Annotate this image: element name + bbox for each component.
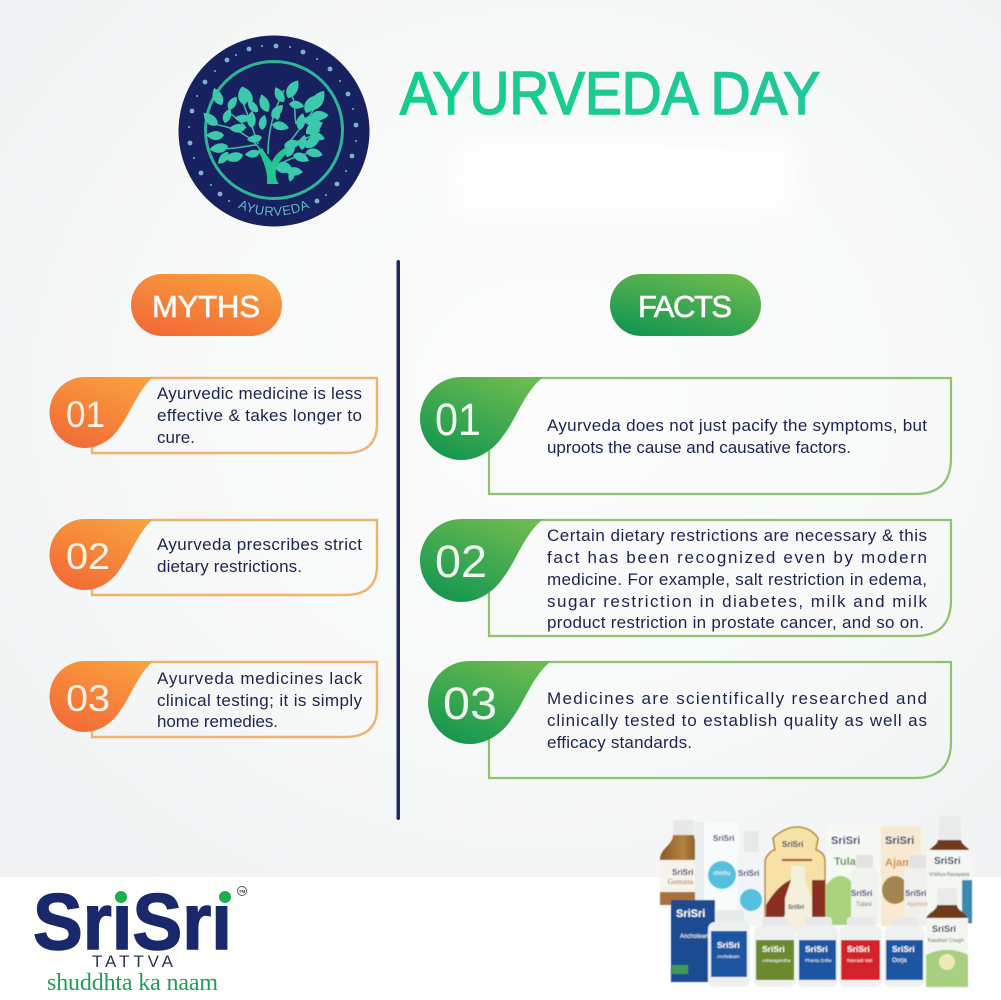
product: anchol carton: SriSri (676, 908, 705, 920)
fact 03 (428, 661, 951, 778)
fact 01 (420, 377, 951, 494)
brand logo: shuddhta ka naam (47, 970, 218, 996)
myth 01: Ayurvedic medicine is less (157, 384, 362, 403)
product: yellow carton: SriSri (782, 840, 803, 849)
product: tulasi carton (826, 825, 880, 925)
product: top right bottle: SriSri (934, 856, 961, 867)
fact 01: Ayurveda does not just pacify the symptoms, but (547, 416, 927, 435)
product: tub 1: Ancholeam (717, 954, 740, 959)
title: AYURVEDA DAY (400, 60, 820, 127)
product group (660, 816, 972, 987)
product: gomutra bottle: Gomutra (668, 878, 694, 886)
myth 03 (50, 661, 377, 737)
product: ajamoda dropper: SriSri (905, 889, 926, 898)
fact 03: Medicines are scientifically researched and (547, 689, 927, 708)
fact 02: sugar restriction in diabetes, milk and milk (547, 592, 928, 611)
product: ajamoda dropper (904, 855, 932, 926)
fact 01: 01 (435, 394, 481, 445)
product: lower right bottle: SriSri (932, 924, 956, 934)
product: tub 5 (884, 917, 925, 987)
badge label: AYURVEDA (238, 200, 310, 216)
product: tub 3: SriSri (805, 944, 828, 954)
product: shishu box (695, 822, 739, 926)
heading: myths (131, 274, 282, 336)
myth 01: effective & takes longer to (157, 406, 362, 425)
heading: facts (610, 274, 761, 336)
product: tulasi dropper: SriSri (851, 889, 872, 898)
product: tub 2: Ashwagandha (762, 958, 791, 963)
product: tub 1: SriSri (717, 940, 740, 950)
product: yellow carton: SriSri (788, 905, 804, 911)
product: anchol carton (671, 900, 715, 982)
product: tub 4: Rasnadi Vati (847, 958, 872, 963)
product: ajamoda dropper: Ajamoda (907, 902, 931, 908)
brand logo: SriSri (33, 877, 232, 966)
footer band (0, 877, 1001, 1000)
fact 02: medicine. For example, salt restriction in edema, (547, 570, 927, 589)
fact 03: 03 (443, 678, 497, 729)
product: anchol carton: Ancholeam (680, 934, 710, 940)
fact 02: Certain dietary restrictions are necessary & this (547, 526, 927, 545)
tree (200, 77, 329, 184)
product: lower right bottle: Kasahari Cough (928, 938, 964, 944)
myth 01 (50, 377, 377, 453)
fact 01: uproots the cause and causative factors. (547, 438, 851, 457)
product: shishu box: shishu (713, 871, 730, 877)
product: ajamoda carton: SriSri (885, 835, 914, 847)
product: top right bottle: Vrishya Rasayana (929, 872, 970, 878)
myth 02 (50, 519, 377, 595)
product: tulasi carton: SriSri (831, 835, 860, 847)
product: gomutra bottle: SriSri (672, 868, 693, 877)
product: tub 4 (839, 917, 882, 987)
myth 02: dietary restrictions. (157, 557, 302, 576)
product: tulasi dropper (851, 855, 878, 926)
product: gomutra bottle (660, 820, 706, 905)
product: shishu box: SriSri (713, 834, 734, 843)
product: tub 4: SriSri (847, 944, 870, 954)
myth 02: 02 (66, 536, 110, 577)
product: tulasi dropper: Tulasi (856, 902, 872, 908)
product: tulasi carton: Tulas (834, 856, 862, 868)
product: tub 3: Phanta Grthe (805, 958, 832, 963)
heading: facts: FACTS (638, 289, 732, 324)
myth 02: Ayurveda prescribes strict (157, 535, 362, 554)
product: lower right bottle (926, 888, 968, 987)
fact 02 (420, 519, 951, 636)
myth 03: 03 (66, 678, 110, 719)
blurred white patch (455, 140, 795, 215)
product: ajamoda carton: Ajamo (885, 857, 919, 869)
myth 03: clinical testing; it is simply (157, 691, 362, 710)
fact 03: clinically tested to establish quality as well as (547, 711, 927, 730)
product: shishu bottle (737, 831, 764, 926)
product: tub 5: SriSri (892, 944, 915, 954)
logo badge: ayurveda tree (178, 36, 370, 226)
product: shishu bottle: SriSri (738, 869, 759, 878)
fact 03: efficacy standards. (547, 733, 692, 752)
product: top right bottle (927, 816, 972, 923)
myth 03: home remedies. (157, 712, 278, 731)
product: tub 3 (797, 917, 838, 987)
product: tub 5: Oorja (892, 958, 907, 964)
brand logo: TATTVA (92, 952, 174, 971)
myth 01: cure. (157, 428, 195, 447)
fact 02: 02 (435, 536, 487, 587)
fact 02: fact has been recognized even by modern (547, 548, 927, 567)
product: tub 2 (754, 917, 796, 987)
product: yellow carton (765, 827, 825, 932)
fact 02: product restriction in prostate cancer, and so on. (547, 613, 924, 632)
brand logo: TM (239, 889, 246, 894)
heading: myths: MYTHS (152, 289, 260, 324)
myth 03: Ayurveda medicines lack (157, 669, 362, 688)
product: tub 2: SriSri (762, 944, 785, 954)
myth 01: 01 (66, 394, 105, 435)
product: ajamoda carton (881, 826, 921, 926)
product: tub 1 (708, 910, 750, 987)
center divider (396, 260, 400, 820)
